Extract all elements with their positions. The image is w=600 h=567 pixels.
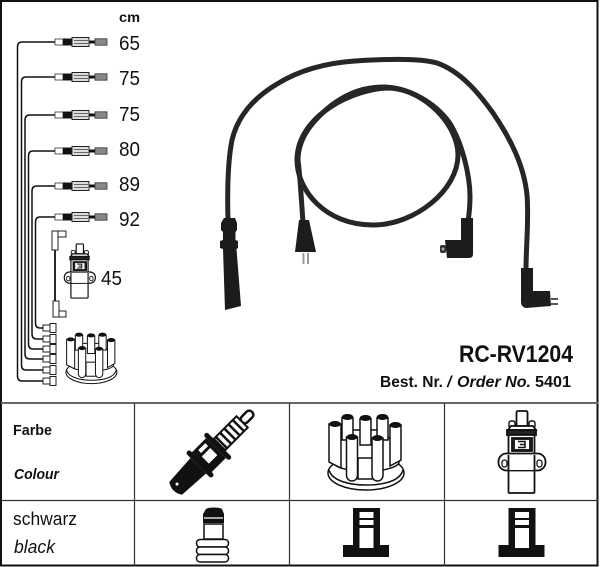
table: [1, 399, 598, 566]
order number: Best. Nr.: [380, 374, 443, 391]
length labels: [101, 9, 140, 290]
coil lead: [52, 231, 66, 317]
boot: right angle long: [521, 268, 558, 308]
header labels: Farbe: [13, 422, 52, 439]
order number: /: [446, 374, 453, 391]
colour labels: black: [14, 537, 56, 557]
product title: RC-RV1204: [459, 341, 574, 368]
icon: distributor terminal: [343, 508, 389, 557]
ignition cable set photo: [220, 59, 558, 310]
icon: coil terminal: [498, 508, 544, 557]
length labels: 89: [119, 174, 140, 196]
table grid: [1, 403, 598, 566]
icon: distributor cap: [328, 415, 404, 490]
wiring diagram: [18, 9, 140, 386]
icon: spark plug: [161, 399, 265, 503]
distributor end connectors: [43, 324, 56, 386]
colour labels: [13, 509, 77, 557]
length labels: 75: [119, 68, 140, 90]
small distributor cap icon: [66, 333, 117, 384]
length labels: 45: [101, 268, 122, 290]
icon: spark plug boot terminal: [196, 508, 228, 562]
order number: Order No.: [457, 374, 531, 391]
boot: right angle short: [440, 218, 473, 258]
icon: coil: [498, 411, 546, 493]
length labels: 80: [119, 139, 140, 161]
boot: long straight: [220, 218, 241, 310]
length labels: 75: [119, 104, 140, 126]
boot: tapered with pins: [295, 220, 316, 264]
cables: [228, 59, 528, 270]
colour labels: schwarz: [13, 509, 77, 529]
small coil icon: [64, 244, 95, 298]
leads with spark plug connectors: [18, 42, 55, 381]
plug connectors: [55, 38, 107, 222]
length labels: 92: [119, 209, 140, 231]
length labels: cm: [119, 9, 140, 25]
length labels: 65: [119, 33, 140, 55]
header labels: [13, 422, 60, 483]
header labels: Colour: [14, 466, 60, 483]
order number: 5401: [535, 374, 571, 391]
order number: [380, 374, 571, 391]
